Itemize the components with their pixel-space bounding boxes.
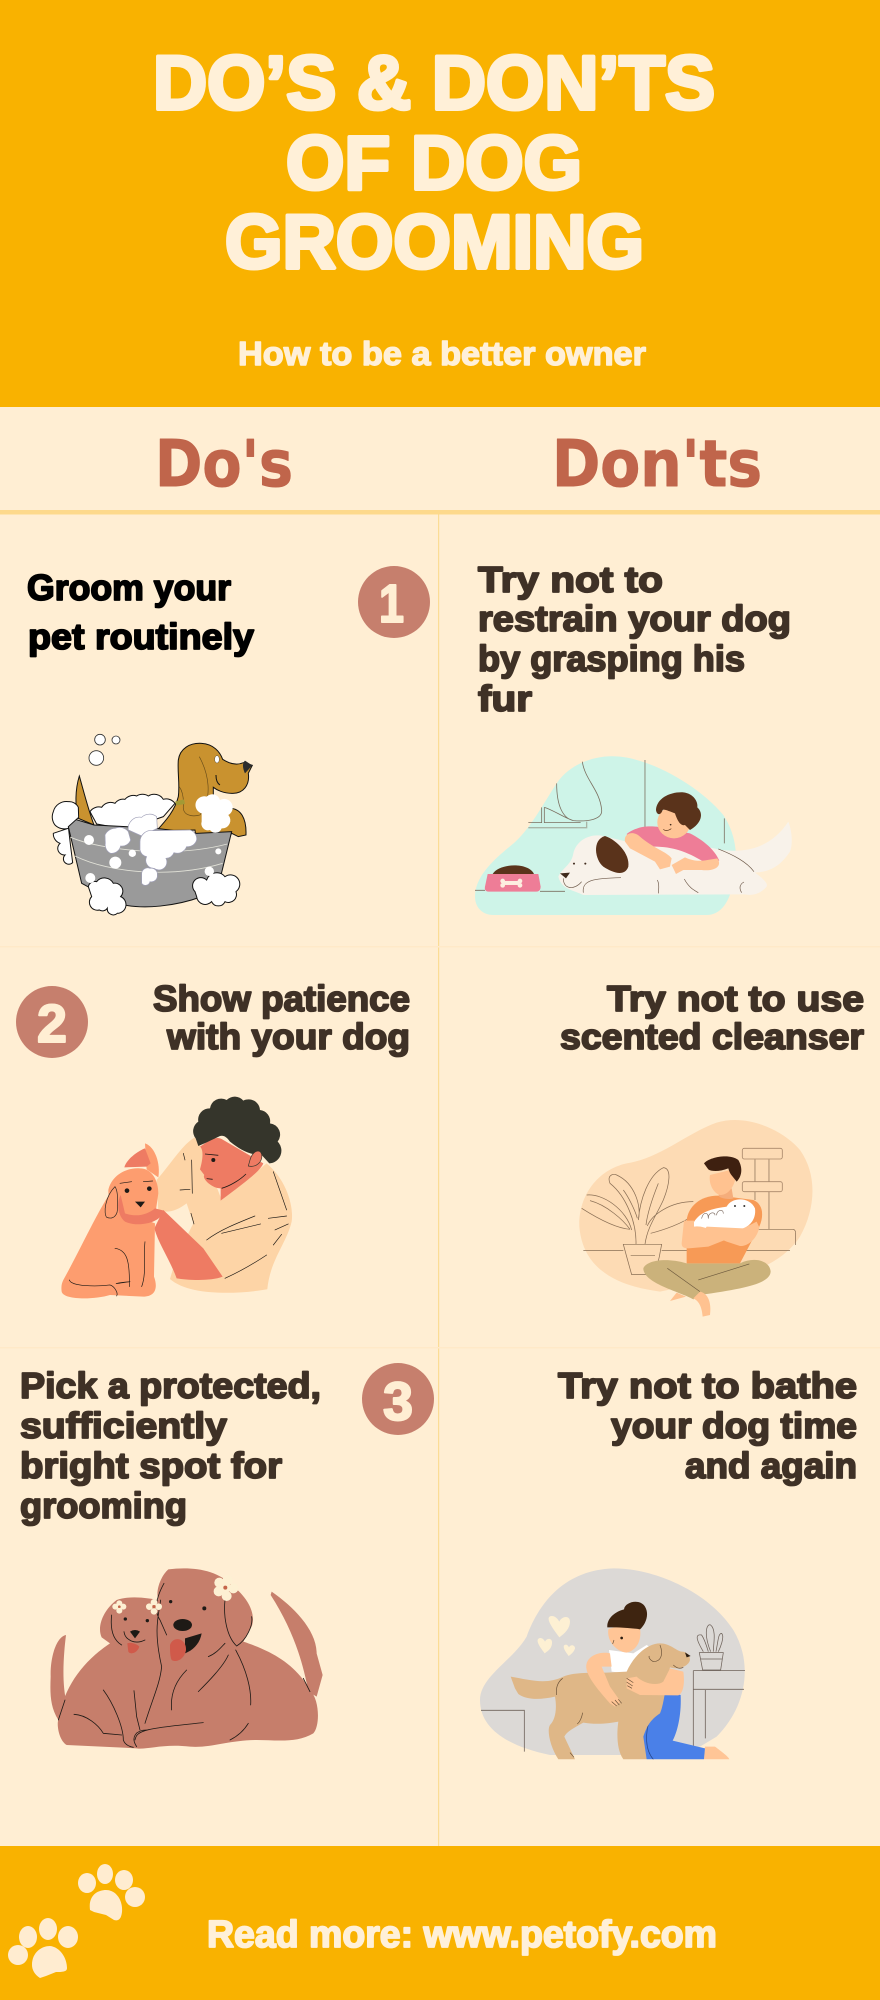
panel: do 3 text — [20, 1365, 321, 1526]
panel: do 2 text: with your dog — [166, 1016, 410, 1057]
panel: do 1 text — [27, 567, 254, 657]
panel: dont 3 text: Try not to bathe — [558, 1365, 857, 1406]
illustration: two dogs with flowers — [50, 1568, 323, 1749]
panel: dont 1 text: Try not to — [478, 559, 663, 600]
panel: do 2 text: Show patience — [153, 978, 410, 1019]
panel: dont 2 text — [560, 978, 864, 1057]
panel: dont 3 text — [558, 1365, 857, 1486]
panel: dont 2 text: scented cleanser — [560, 1016, 864, 1057]
illustration: dog in wash tub — [52, 734, 252, 915]
icon: paw lower — [8, 1918, 78, 1978]
panel: do 3 text: Pick a protected, — [20, 1365, 321, 1406]
panel: dont 3 text: and again — [685, 1445, 857, 1486]
footer link text: Read more: www.petofy.com — [207, 1914, 717, 1956]
panel: dont 3 text: your dog time — [611, 1405, 857, 1446]
column header band — [0, 428, 880, 514]
panel: dont 2 text: Try not to use — [607, 978, 864, 1019]
footer band — [0, 1846, 880, 2000]
subtitle: How to be a better owner — [238, 335, 646, 372]
heading: Do's: Do's — [155, 428, 293, 502]
illustration: man holding cat — [579, 1120, 812, 1317]
title: OF DOG — [286, 121, 582, 206]
heading: Don'ts: Don'ts — [552, 428, 762, 502]
icon: paw upper — [78, 1864, 145, 1920]
panel: do 1 text: Groom your — [27, 567, 231, 608]
title — [153, 41, 715, 285]
number badge 2 — [16, 986, 88, 1058]
illustration: woman hugging dog — [480, 1568, 745, 1759]
number badge 2: 2 — [37, 994, 67, 1054]
panel: dont 1 text: restrain your dog — [478, 598, 791, 639]
number badge 3 — [362, 1363, 434, 1435]
illustration: owner hugging dog with bowl — [475, 756, 792, 915]
number badge 1: 1 — [379, 574, 404, 634]
panel: dont 1 text: fur — [478, 678, 532, 719]
panel: do 3 text: bright spot for — [20, 1445, 282, 1486]
title: GROOMING — [225, 200, 644, 285]
number badge 3: 3 — [383, 1372, 413, 1432]
panel: do 2 text — [153, 978, 410, 1057]
number badge 1 — [358, 566, 430, 638]
title: DO’S & DON’TS — [153, 41, 715, 126]
panel: do 3 text: grooming — [20, 1485, 187, 1526]
illustration: man checking dog — [61, 1097, 292, 1298]
panel: do 3 text: sufficiently — [20, 1405, 227, 1446]
panel: dont 1 text: by grasping his — [478, 638, 745, 679]
panel: dont 1 text — [478, 559, 791, 719]
header banner — [0, 0, 880, 407]
panel: do 1 text: pet routinely — [28, 616, 254, 657]
